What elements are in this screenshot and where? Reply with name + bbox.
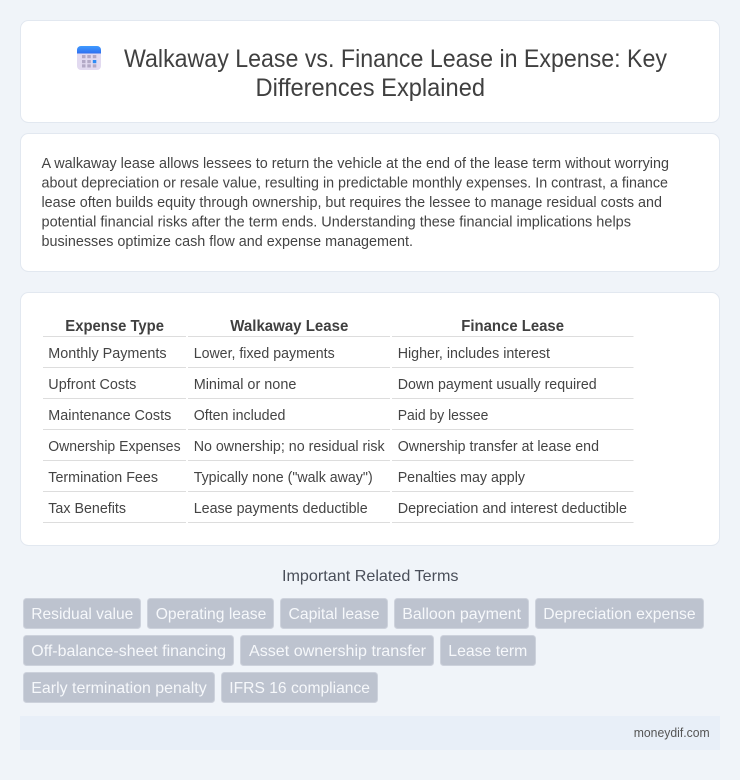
tag: lease term: Lease term [448,643,527,660]
row: ownership expenses [48,439,599,455]
tag: balloon payment [394,598,528,628]
tag: off-balance-sheet financing: Off-balance-sheet financing [31,643,226,660]
row: monthly payments: Lower, fixed payments [194,346,335,362]
text block: introduction paragraph: potential financial risks after the term ends. Understanding these financial implications helps [42,214,631,230]
tag: depreciation expense [536,598,704,628]
tag: residual value [24,598,140,628]
row: ownership expenses: No ownership; no residual risk [194,439,385,455]
footer [20,716,720,750]
panel: introduction [20,134,720,272]
icon: calendar [77,46,101,70]
row: maintenance costs [48,408,488,424]
table header row: Walkaway Lease [230,318,349,335]
tag: operating lease: Operating lease [156,606,266,623]
row: upfront costs [48,377,597,393]
row: maintenance costs: Maintenance Costs [48,408,171,424]
footer: moneydif.com [634,725,710,740]
tag: balloon payment: Balloon payment [402,606,522,623]
row: termination fees: Typically none ("walk away") [194,470,373,486]
row: maintenance costs: Paid by lessee [398,408,488,424]
row: termination fees [48,470,526,486]
row: tax benefits: Depreciation and interest deductible [398,501,627,517]
row: termination fees: Termination Fees [48,470,158,486]
row: tax benefits: Lease payments deductible [194,501,368,517]
title [124,45,667,102]
row: maintenance costs: Often included [194,408,285,424]
row: upfront costs: Minimal or none [194,377,296,393]
tag: off-balance-sheet financing [24,636,234,666]
row: monthly payments: Monthly Payments [48,346,167,362]
panel: comparison table [20,292,720,546]
row: ownership expenses: Ownership Expenses [48,439,181,455]
tag: IFRS 16 compliance [222,672,378,702]
tag: early termination penalty: Early termination penalty [31,680,207,697]
text block: introduction paragraph: lease often builds equity through ownership, but requires the lessee to manage residual costs and [42,195,662,211]
title: Walkaway Lease vs. Finance Lease in Expense: Key [124,45,667,73]
tag: asset ownership transfer [240,636,434,666]
tag: capital lease: Capital lease [288,606,380,623]
tag: IFRS 16 compliance: IFRS 16 compliance [229,680,370,697]
panel: related term tags [24,598,704,702]
tag: operating lease [148,598,274,628]
row: termination fees: Penalties may apply [398,470,526,486]
panel: header [20,20,720,122]
tag: lease term [440,636,536,666]
text block: introduction paragraph [42,156,669,250]
heading: important related terms: Important Related Terms [282,568,458,585]
row: upfront costs: Down payment usually required [398,377,597,393]
table header row: Finance Lease [461,318,564,335]
row: tax benefits: Tax Benefits [48,501,126,517]
tag: asset ownership transfer: Asset ownership transfer [249,643,427,660]
text block: introduction paragraph: A walkaway lease allows lessees to return the vehicle at the end of the lease term without worrying [42,156,669,172]
table header row: Expense Type [65,318,164,335]
text block: introduction paragraph: about depreciation or resale value, resulting in predictable monthly expenses. In contrast, a finance [42,176,668,192]
tag: early termination penalty [24,672,214,702]
row: monthly payments [48,346,550,362]
row: upfront costs: Upfront Costs [48,377,136,393]
row: ownership expenses: Ownership transfer at lease end [398,439,599,455]
tag: capital lease [280,598,388,628]
row: monthly payments: Higher, includes interest [398,346,550,362]
table header row [65,318,564,335]
row: tax benefits [48,501,627,517]
tag: residual value: Residual value [31,606,133,623]
title: Differences Explained [256,74,485,102]
tag: depreciation expense: Depreciation expense [543,606,696,623]
text block: introduction paragraph: businesses optimize cash flow and expense management. [42,234,413,250]
